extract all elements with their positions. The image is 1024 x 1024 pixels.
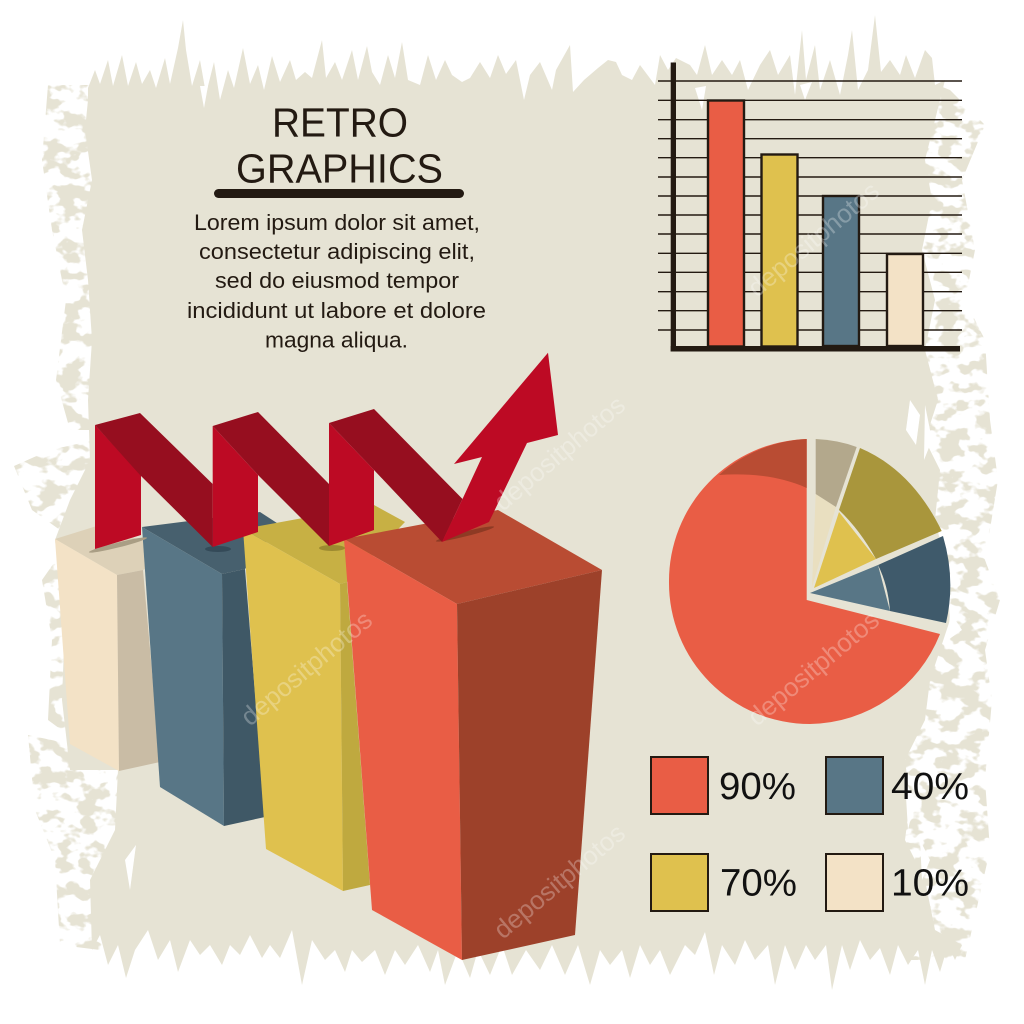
watermark text: depositphotos — [488, 818, 631, 945]
watermark text: depositphotos — [742, 605, 885, 732]
3D bars with arrow — [55, 353, 602, 960]
legend item 10%: 10% — [891, 862, 969, 904]
description text block: magna aliqua. — [265, 328, 408, 352]
legend item 40% — [826, 757, 969, 814]
description text block: consectetur adipiscing elit, — [199, 239, 475, 264]
zigzag rising arrow — [88, 353, 558, 555]
legend item 90% — [651, 757, 796, 814]
bar chart — [658, 62, 962, 352]
legend item 70% — [651, 854, 797, 911]
legend item 90%: 90% — [719, 766, 796, 808]
pie slice: cream — [812, 439, 857, 587]
title: Retro Graphics: RETRO — [272, 100, 408, 146]
3D bar: cream — [55, 525, 175, 771]
description text block — [187, 210, 486, 352]
title: Retro Graphics — [214, 100, 464, 198]
watermark text: depositphotos — [742, 176, 885, 303]
watermark text — [235, 176, 885, 945]
description text block: incididunt ut labore et dolore — [187, 298, 486, 323]
watermark text: depositphotos — [235, 605, 378, 732]
description text block: Lorem ipsum dolor sit amet, — [194, 210, 480, 235]
watermark text: depositphotos — [488, 390, 631, 517]
pie slice: yellow — [814, 448, 942, 588]
legend item 40%: 40% — [891, 766, 969, 808]
legend — [651, 757, 969, 911]
3D bar: red — [344, 510, 602, 960]
legend item 10% — [826, 854, 969, 911]
3D bar: blue — [142, 512, 280, 826]
pie slice: red — [669, 439, 940, 724]
description text block: sed do eiusmod tempor — [215, 268, 460, 293]
pie slice: blue — [810, 536, 950, 623]
title: Retro Graphics: GRAPHICS — [236, 146, 443, 192]
3D bar: yellow — [243, 505, 405, 891]
legend item 70%: 70% — [720, 862, 797, 904]
pie chart — [669, 439, 950, 724]
